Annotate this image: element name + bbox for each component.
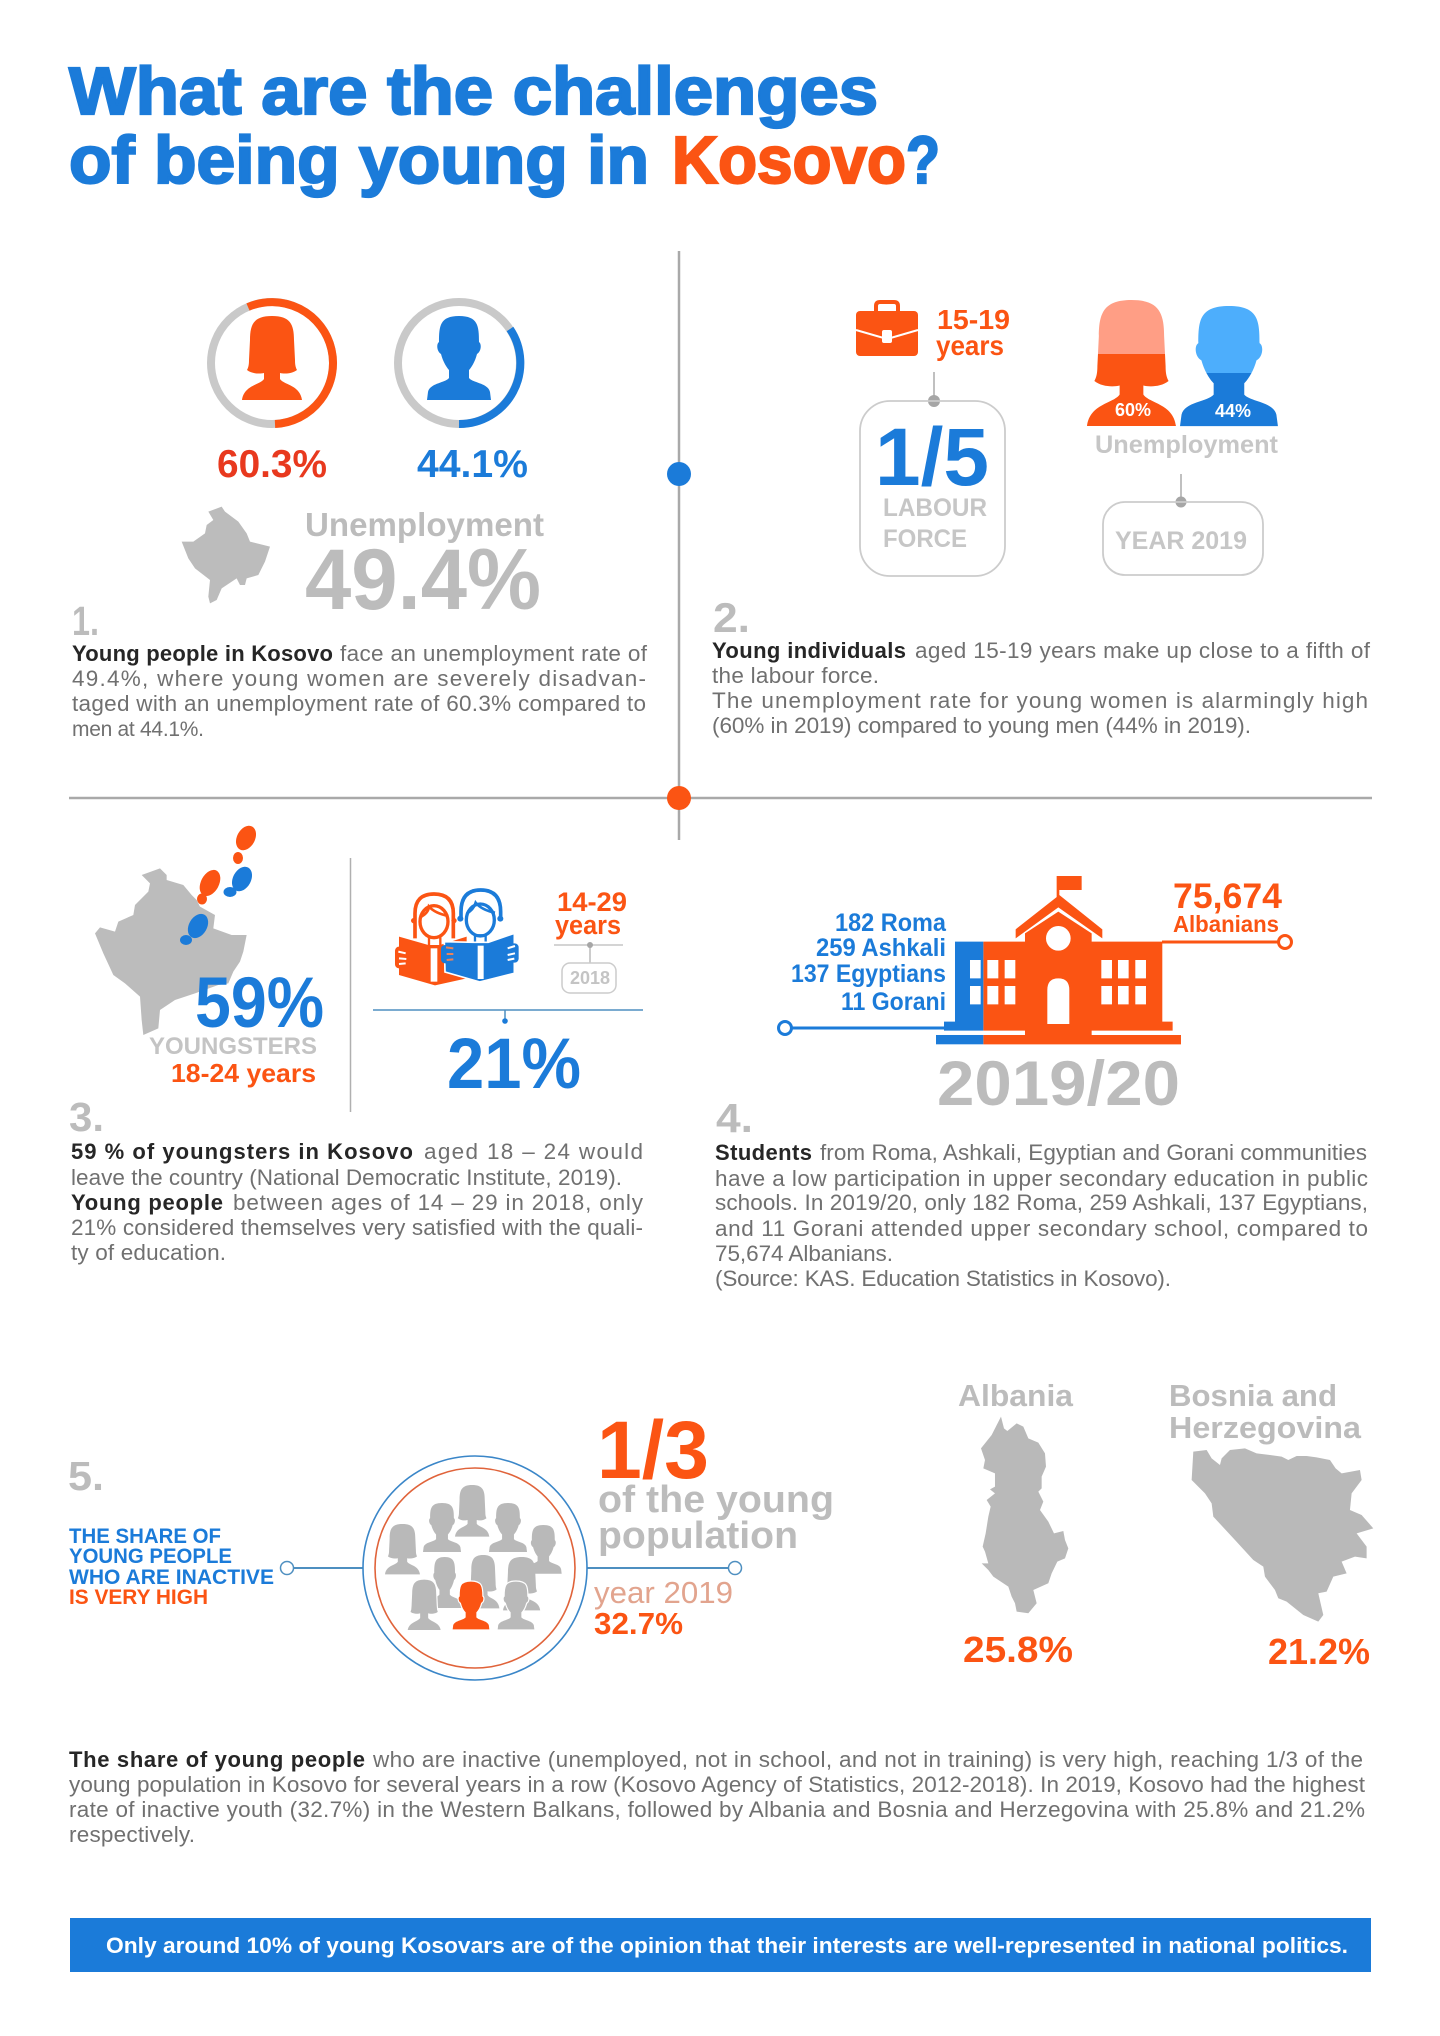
connector left [280, 1562, 363, 1574]
text block 1: face an unemployment rate of [340, 641, 648, 666]
section number 1: 1. [72, 598, 99, 644]
inactive youth label [69, 1525, 274, 1609]
title: What are the challenges [69, 54, 878, 129]
icon: Kosovo map [95, 868, 247, 1035]
map: Albania [981, 1417, 1068, 1613]
callout banner: Only around 10% of young Kosovars are of the opinion that their interests are well-represented in national politics. [106, 1933, 1348, 1958]
youngsters label: YOUNGSTERS [149, 1033, 317, 1060]
text block 3: 21% considered themselves very satisfied with the quali- [71, 1215, 643, 1240]
text block 2: (60% in 2019) compared to young men (44% in 2019). [712, 713, 1251, 738]
Albanian students count: Albanians [1173, 911, 1279, 937]
icon: woman silhouette filled to 60%: 60% [1115, 400, 1151, 420]
text block 3: Young people [71, 1190, 223, 1215]
icon: Kosovo map [182, 507, 270, 603]
text block 4: (Source: KAS. Education Statistics in Kosovo). [715, 1266, 1171, 1291]
age label 15-19 years: 15-19 [937, 304, 1010, 335]
title: of being young in [69, 123, 649, 198]
year 2019 box [1103, 502, 1263, 575]
section number 2: 2. [713, 594, 750, 641]
icon: footprints leaving Kosovo [180, 822, 260, 945]
age label 14-29 years: 14-29 [557, 887, 627, 917]
icon: young woman ring 60.3% [211, 302, 333, 424]
section number 3: 3. [69, 1094, 104, 1140]
icon: two students reading [395, 890, 519, 985]
Bosnia and Herzegovina label [1169, 1378, 1362, 1445]
text block 4 [715, 1140, 1368, 1291]
inactive youth label: YOUNG PEOPLE [69, 1545, 232, 1568]
year 2018 tag with connector: 2018 [570, 968, 610, 988]
panel: leaving the country and education [69, 822, 644, 1265]
text block 1: 49.4%, where young women are severely disadvan- [72, 666, 646, 691]
text block 5: The share of young people [69, 1747, 365, 1772]
section number 5: 5. [68, 1453, 104, 1499]
horizontal divider with orange marker [69, 786, 1372, 810]
labour force box [860, 401, 1005, 576]
Kosovo value 32.7%: 32.7% [594, 1606, 683, 1641]
school year: 2019/20 [937, 1049, 1180, 1119]
community counts: 259 Ashkali [816, 934, 946, 962]
Albanian students count: 75,674 [1173, 877, 1283, 916]
panel: minority students in secondary school [715, 876, 1368, 1291]
label of the young population: of the young [598, 1479, 834, 1521]
Bosnia and Herzegovina label: Bosnia and [1169, 1378, 1337, 1413]
text block 3: 59 % of youngsters in Kosovo [71, 1139, 413, 1164]
inner divider [350, 858, 352, 1112]
double ring [363, 1456, 587, 1680]
text block 5: respectively. [69, 1822, 195, 1847]
text block 5: rate of inactive youth (32.7%) in the Western Balkans, followed by Albania and Bosnia and Herzegovina with 25.8% and 21.2% [69, 1797, 1365, 1822]
icon: briefcase [856, 302, 918, 356]
Albania value: 25.8% [963, 1629, 1073, 1670]
icon: young man ring 44.1% [398, 302, 520, 424]
text block 4: 75,674 Albanians. [715, 1241, 893, 1266]
title: Kosovo [672, 123, 906, 198]
age label 14-29 years [555, 887, 627, 940]
connector right [587, 1562, 742, 1574]
text block 1: taged with an unemployment rate of 60.3% compared to [72, 691, 646, 716]
year 2019 box: YEAR 2019 [1115, 527, 1247, 555]
panel: labour force [712, 300, 1371, 738]
text block 1: men at 44.1%. [72, 718, 204, 741]
section number 4: 4. [716, 1095, 753, 1141]
women's unemployment value: 60.3% [217, 443, 327, 486]
value 59%: 59% [195, 964, 324, 1043]
year 2018 tag with connector [554, 942, 623, 993]
text block 4: have a low participation in upper secondary education in public [715, 1166, 1368, 1191]
icon: man silhouette filled to 44%: 44% [1215, 401, 1251, 421]
text block 1 [72, 641, 648, 741]
orange leader line [1162, 936, 1292, 948]
text block 3: ty of education. [71, 1240, 226, 1265]
connector to labour force box [928, 372, 940, 407]
inactive youth label: WHO ARE INACTIVE [69, 1566, 274, 1589]
age label 15-19 years [936, 304, 1010, 361]
text block 2: The unemployment rate for young women is alarmingly high [712, 688, 1368, 713]
icon: woman silhouette filled to 60% [1087, 300, 1176, 426]
men's unemployment value: 44.1% [417, 443, 528, 486]
text block 4: and 11 Gorani attended upper secondary school, compared to [715, 1216, 1368, 1241]
text block 1: Young people in Kosovo [72, 641, 333, 666]
callout banner [70, 1918, 1371, 1972]
headline 1/3: 1/3 [597, 1405, 709, 1496]
text block 5: young population in Kosovo for several years in a row (Kosovo Agency of Statistics, 2012-2018). In 2019, Kosovo had the highest [69, 1772, 1366, 1797]
title: ? [906, 123, 940, 198]
community counts [791, 909, 947, 1016]
text block 5: who are inactive (unemployed, not in school, and not in training) is very high, reaching 1/3 of the [372, 1747, 1363, 1772]
age label 18-24 years: 18-24 years [171, 1058, 316, 1088]
vertical divider with blue marker [667, 251, 691, 840]
title [69, 54, 940, 198]
connector to year box [1176, 474, 1186, 508]
text block 4: Students [715, 1140, 812, 1165]
labour force box: 1/5 [875, 412, 989, 503]
icon: man silhouette filled to 44% [1180, 306, 1278, 426]
panel: youth unemployment [72, 302, 648, 741]
community counts: 137 Egyptians [791, 960, 946, 988]
labour force box: FORCE [883, 525, 967, 553]
text block 2: Young individuals [712, 638, 906, 663]
unemployment label: Unemployment [1095, 431, 1279, 459]
panel: inactive youth [68, 1378, 1373, 1847]
text block 2 [712, 638, 1371, 738]
icon: crowd with one person in three highlighted [385, 1485, 562, 1631]
Albanian students count [1173, 877, 1283, 937]
inactive youth label: THE SHARE OF [69, 1525, 221, 1548]
text block 4: from Roma, Ashkali, Egyptian and Gorani communities [820, 1140, 1367, 1165]
age label 15-19 years: years [936, 330, 1004, 361]
text block 2: the labour force. [712, 663, 879, 688]
community counts: 11 Gorani [841, 988, 946, 1016]
text block 2: aged 15-19 years make up close to a fifth of [915, 638, 1371, 663]
text block 3: between ages of 14 – 29 in 2018, only [233, 1190, 644, 1215]
value 21%: 21% [447, 1025, 581, 1104]
map: Bosnia and Herzegovina [1192, 1448, 1373, 1622]
Bosnia and Herzegovina value: 21.2% [1268, 1631, 1370, 1672]
icon: school building split blue and orange [936, 876, 1181, 1044]
year 2019 label: year 2019 [594, 1575, 733, 1610]
unemployment label: Unemployment [305, 506, 544, 543]
age label 14-29 years: years [555, 910, 621, 940]
community counts: 182 Roma [835, 909, 947, 937]
inactive youth label: IS VERY HIGH [69, 1586, 208, 1609]
overall unemployment value: 49.4% [305, 532, 541, 628]
text block 4: schools. In 2019/20, only 182 Roma, 259 Ashkali, 137 Egyptians, [715, 1190, 1368, 1215]
blue rule with tick [373, 1010, 643, 1024]
text block 3: aged 18 – 24 would [424, 1139, 643, 1164]
Albania label: Albania [958, 1378, 1074, 1413]
text block 5 [69, 1747, 1366, 1847]
text block 3: leave the country (National Democratic Institute, 2019). [71, 1165, 622, 1190]
Bosnia and Herzegovina label: Herzegovina [1169, 1410, 1362, 1445]
label of the young population [598, 1479, 834, 1557]
text block 3 [71, 1139, 644, 1265]
label of the young population: population [598, 1515, 798, 1557]
labour force box: LABOUR [883, 494, 987, 522]
blue leader line [778, 1022, 945, 1034]
